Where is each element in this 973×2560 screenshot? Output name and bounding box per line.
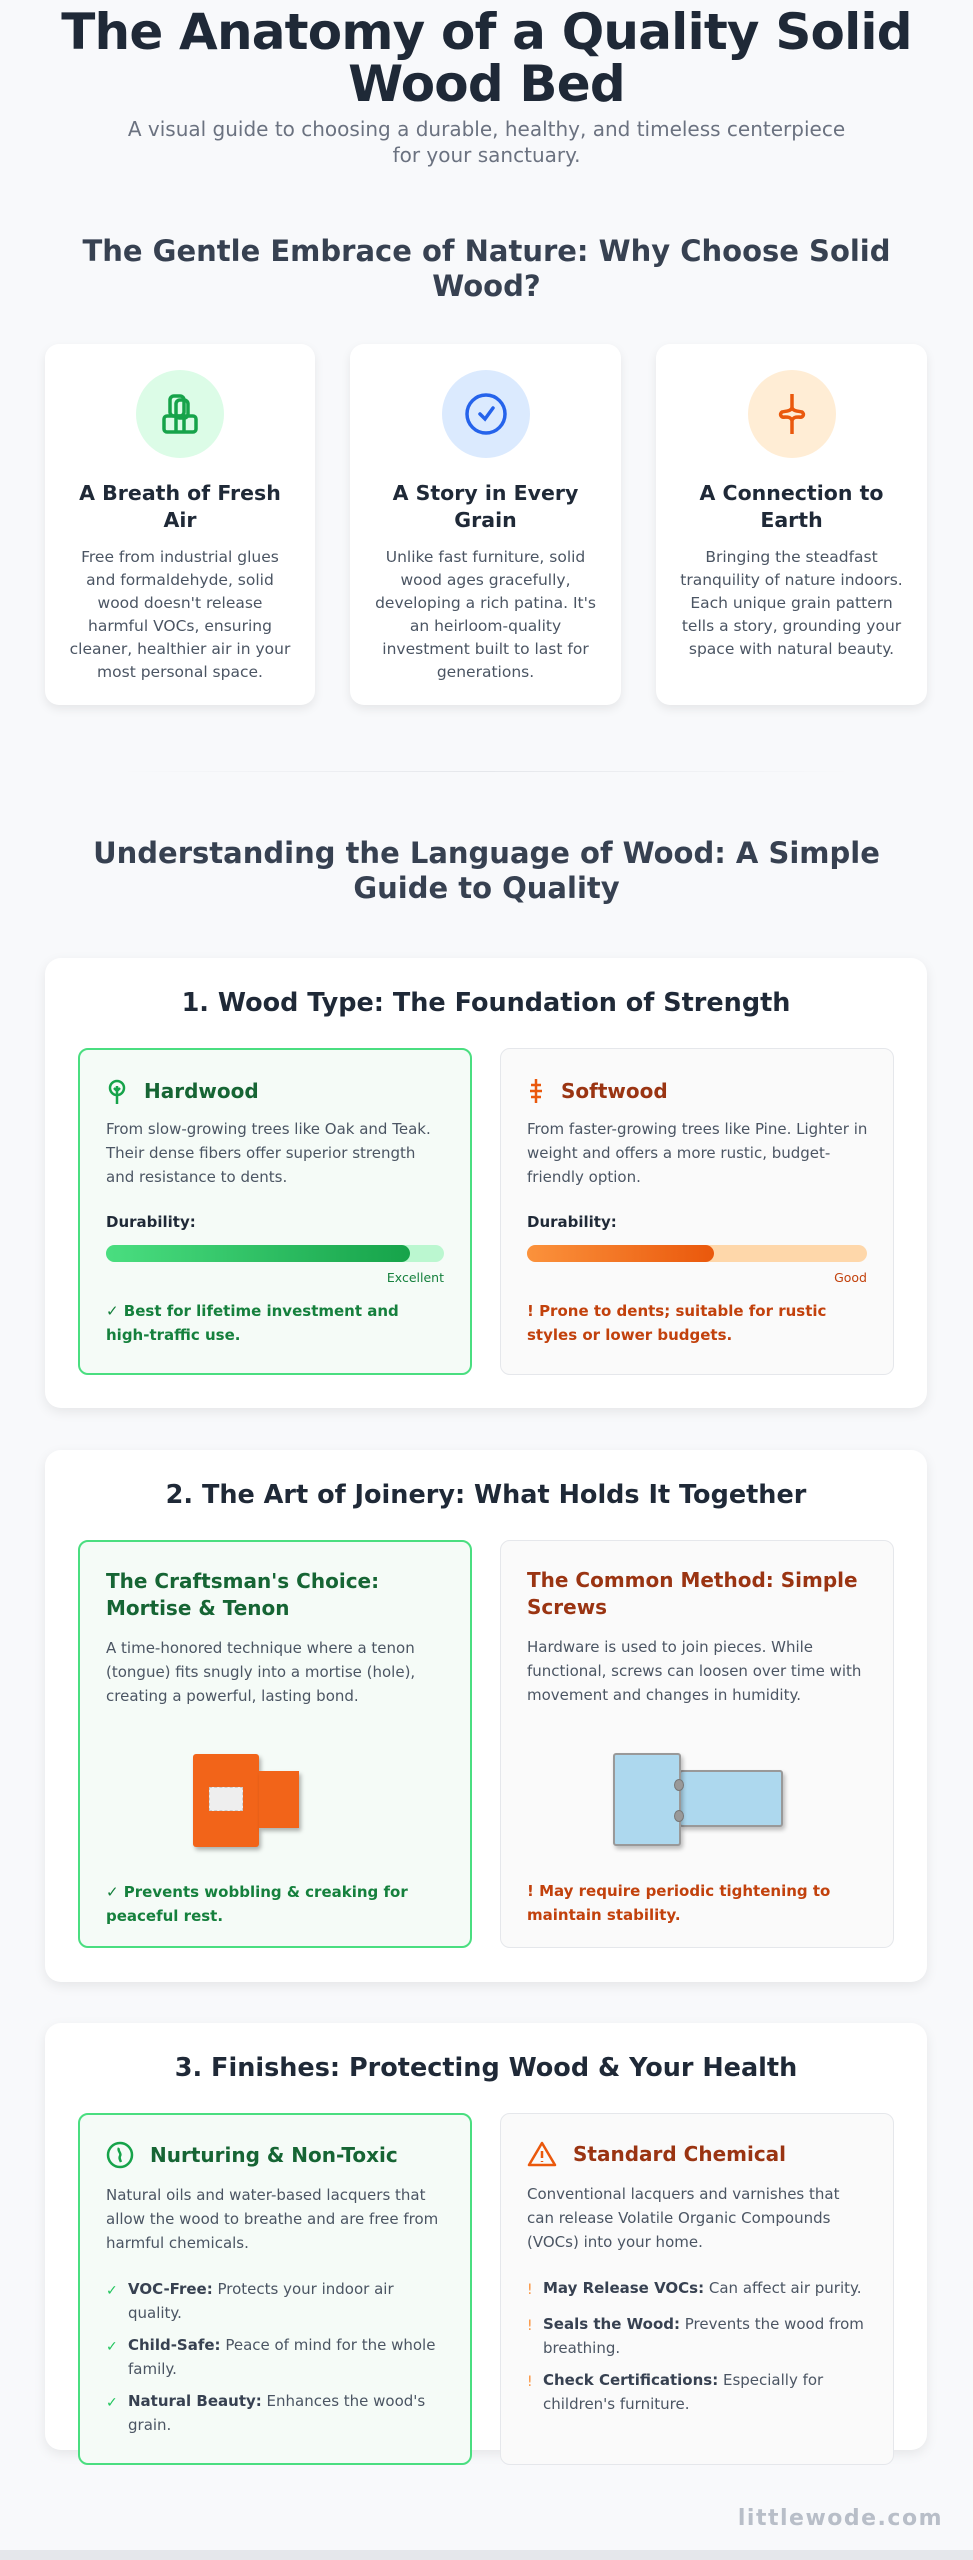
illustration: mortise and tenon [192,1754,304,1852]
softwood card: From faster-growing trees like Pine. Lighter in weight and offers a more rustic, budget-friendly option. [527,1120,867,1186]
panel: finishes [45,2023,927,2450]
subtitle: for your sanctuary. [393,143,580,167]
card: earth: Bringing the steadfast tranquility of nature indoors. Each unique grain pattern tells a story, grounding your space with natural beauty. [680,548,903,658]
card: earth: A Connection to Earth [700,481,883,532]
heading: why choose solid wood: The Gentle Embrace of Nature: Why Choose Solid Wood? [82,234,891,303]
chemical card: ! [527,2318,533,2334]
footer: brand: littlewode.com [738,2506,943,2531]
non-toxic card: Natural oils and water-based lacquers that allow the wood to breathe and are free from harmful chemicals. [106,2186,438,2252]
heading: 1. Wood Type: The Foundation of Strength [182,988,790,1018]
softwood card: ! Prone to dents; suitable for rustic styles or lower budgets. [527,1302,826,1344]
screws card: ! May require periodic tightening to maintain stability. [527,1882,830,1924]
hardwood card: From slow-growing trees like Oak and Teak. Their dense fibers offer superior strength and resistance to dents. [106,1120,431,1186]
chemical card: Seals the Wood: Prevents the wood from breathing. [543,2315,864,2357]
heading: 2. The Art of Joinery: What Holds It Together [166,1480,806,1510]
icon: air [136,370,224,458]
icon: check circle [442,370,530,458]
softwood card: Good [834,1270,867,1285]
mortise card: The Craftsman's Choice: Mortise & Tenon [106,1569,379,1620]
icon: earth [748,370,836,458]
screws card: Hardware is used to join pieces. While functional, screws can loosen over time with movement and changes in humidity. [527,1638,861,1704]
card: fresh air: A Breath of Fresh Air [79,481,281,532]
hardwood title: Hardwood [144,1079,259,1103]
card: fresh air [45,344,315,705]
non-toxic card: ✓ [106,2283,118,2299]
chemical card: ! [527,2282,533,2298]
hardwood card [78,1048,472,1375]
softwood title: Softwood [561,1078,668,1102]
non-toxic card: Natural Beauty: Enhances the wood's grain. [128,2392,425,2434]
durability bar [527,1245,867,1262]
mortise card: A time-honored technique where a tenon (tongue) fits snugly into a mortise (hole), creating a powerful, lasting bond. [106,1639,415,1705]
hardwood card: Durability: [106,1213,196,1231]
softwood card: Durability: [527,1213,617,1231]
card: earth [656,344,927,705]
non-toxic card [78,2113,472,2465]
panel: joinery [45,1450,927,1982]
heading: language of wood: Understanding the Language of Wood: A Simple Guide to Quality [93,836,880,905]
chemical card [500,2113,894,2465]
card: grain: Unlike fast furniture, solid wood ages gracefully, developing a rich patina. It's an heirloom-quality investment built to last for generations. [375,548,596,681]
hardwood card: ✓ Best for lifetime investment and high-traffic use. [106,1302,399,1344]
non-toxic card: VOC-Free: Protects your indoor air quality. [128,2280,394,2322]
chemical card: Conventional lacquers and varnishes that can release Volatile Organic Compounds (VOCs) into your home. [527,2185,839,2251]
card: grain [350,344,621,705]
title: The Anatomy of a Quality Solid Wood Bed [61,3,912,113]
panel: wood type [45,958,927,1408]
hardwood card: Excellent [387,1270,444,1285]
heading: 3. Finishes: Protecting Wood & Your Health [175,2053,797,2083]
non-toxic card: Child-Safe: Peace of mind for the whole family. [128,2336,435,2378]
card: fresh air: Free from industrial glues and formaldehyde, solid wood doesn't release harmful VOCs, ensuring cleaner, healthier air in your most personal space. [70,548,290,681]
non-toxic card: Nurturing & Non-Toxic [150,2142,398,2166]
card: grain: A Story in Every Grain [393,481,578,532]
chemical card: ! [527,2374,533,2390]
chemical card: Standard Chemical [573,2142,786,2166]
chemical card: Check Certifications: Especially for children's furniture. [543,2371,823,2413]
subtitle: A visual guide to choosing a durable, healthy, and timeless centerpiece [128,117,845,141]
screws card [500,1540,894,1948]
chemical card: May Release VOCs: Can affect air purity. [543,2279,862,2297]
illustration: screws [612,1753,788,1852]
softwood card [500,1048,894,1375]
durability bar [106,1245,444,1262]
mortise card: ✓ Prevents wobbling & creaking for peaceful rest. [106,1883,408,1925]
mortise card [78,1540,472,1948]
screws card: The Common Method: Simple Screws [527,1568,858,1619]
subtitle [128,117,845,167]
non-toxic card: ✓ [106,2395,118,2411]
non-toxic card: ✓ [106,2339,118,2355]
